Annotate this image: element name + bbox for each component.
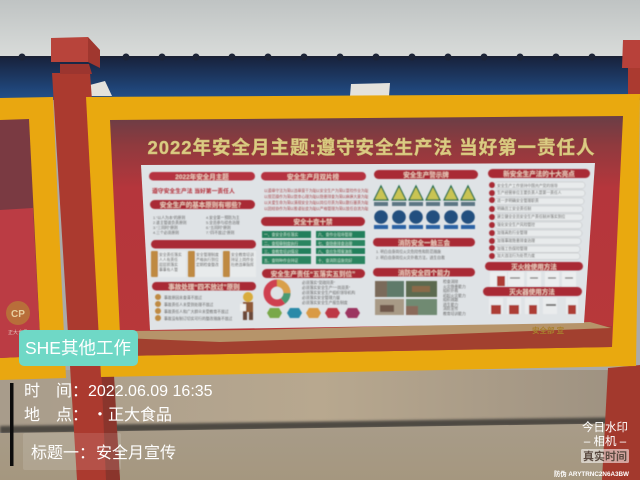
slogan list: 以敷衍塞责为耻 — [342, 200, 369, 205]
warning labels — [374, 202, 475, 206]
heading pill — [373, 268, 475, 277]
three duty cards — [151, 251, 256, 277]
poster bottom wave — [121, 326, 612, 356]
principles list: 6.“五同时”原则 — [206, 225, 231, 230]
slogan list: 以麻痹大意为耻 — [342, 194, 369, 199]
heading pill — [261, 172, 366, 181]
principles list: 5.全员参与综合治理 — [206, 220, 240, 225]
five-implementation list: 必须落实“党政同责” — [302, 280, 336, 285]
principles list: 2.谁主管谁负责原则 — [153, 220, 187, 225]
heading pill — [151, 240, 256, 248]
principles list: 4.三个必须原则 — [153, 230, 179, 235]
heading pill: 2022年安全月主题 — [175, 172, 229, 181]
white wall patches — [86, 81, 390, 96]
column 1: safety month theme — [149, 172, 256, 321]
poster signature: 安全部 宣 — [532, 325, 565, 335]
principles list: 7.“四不放过”原则 — [206, 230, 235, 235]
heading pill: 消防安全一触三会 — [398, 238, 450, 247]
column 2: slogans and ten-must — [261, 172, 369, 318]
mandatory circle signs — [374, 210, 475, 224]
principles list: 4.安全第一预防为主 — [206, 215, 240, 220]
heading pill — [149, 172, 255, 181]
ten numbered rows: 加强工伤保险管理 — [497, 246, 528, 251]
heading pill — [483, 287, 582, 296]
CP logo: CP — [11, 309, 25, 320]
four abilities list: 组织扑救 — [443, 288, 458, 293]
slogan list: 以推诿扯皮为耻 — [290, 206, 317, 211]
ten numbered rows: 进一步明确安全管理职责 — [497, 198, 539, 203]
fire safety notes — [376, 249, 445, 260]
fire safety notes: 1. 明白自身岗位火灾危险性和防范措施 — [376, 249, 441, 254]
ten numbered rows: 加强事故隐患排查治理 — [497, 238, 535, 243]
four-no list: 事故责任人和广大群众未受教育不放过 — [164, 309, 229, 314]
four-no list: 事故没有制订切实可行的整改措施不放过 — [164, 316, 233, 321]
ten numbered rows: 生产经营单位主要负责人是第一责任人 — [497, 190, 562, 195]
lower concrete wall — [0, 370, 640, 432]
right red post — [602, 40, 640, 480]
donut chart — [267, 283, 287, 303]
column 3: warning signs and fire safety — [373, 170, 478, 316]
timestamp and location block: 点： — [56, 406, 88, 424]
timestamp and location block: 间： — [56, 382, 88, 400]
poster background — [110, 116, 623, 356]
left display board — [0, 97, 66, 380]
four abilities list — [443, 279, 466, 316]
watermark logo: 真实时间 — [583, 449, 627, 463]
fire safety notes: 2. 明白自身岗位火灾扑救方法，逃生自救 — [376, 255, 445, 260]
five-implementation list — [302, 280, 355, 305]
three duty cards: 安全责任落实 — [159, 252, 182, 257]
green rule grid: 三、查教育培训情况 — [264, 249, 298, 254]
slogan list: 以违章蛮干为耻 — [290, 188, 317, 193]
timestamp and location block: 地 — [24, 406, 40, 424]
ten numbered rows: 强化安全生产风险管控 — [497, 222, 535, 227]
five hexagon badges — [267, 308, 360, 318]
five-implementation list: 必须落实安全生产“一岗双责” — [302, 285, 351, 290]
slogan list: 以团结协作为荣 — [264, 206, 291, 211]
three duty cards: 事事有人管 — [159, 267, 178, 272]
principles list: 3.“三同时”原则 — [153, 225, 178, 230]
four-no list: 事故原因未查清不放过 — [164, 295, 202, 300]
four abilities list: 初起火灾能力 — [443, 293, 466, 298]
sky background — [0, 0, 640, 60]
heading pill: 灭火器使用方法 — [509, 287, 555, 296]
four site photos — [375, 281, 437, 315]
four abilities list: 检查消除 — [443, 279, 458, 284]
category tag — [19, 330, 138, 366]
four-no list: 事故责任人未受到处理不放过 — [164, 302, 214, 307]
four abilities list: 逃生能力 — [443, 302, 458, 307]
heading pill: 安全十查十禁 — [294, 217, 333, 226]
three duty cards: 安全教育培训 — [231, 252, 254, 257]
five-implementation list: 必须落实安全管理力量 — [302, 295, 340, 300]
watermark logo — [581, 420, 629, 463]
heading pill: 灭火栓使用方法 — [511, 262, 557, 271]
heading pill — [261, 217, 365, 226]
slogan list: 以岗位尽责为荣 — [316, 200, 343, 205]
four abilities list: 消防宣传 — [443, 306, 458, 311]
three duty cards: 安全管理制度 — [196, 252, 219, 257]
slogan list — [264, 188, 369, 211]
green rule grid — [262, 231, 365, 264]
ten numbered rows: 加强高危行业管理 — [497, 230, 528, 235]
extinguisher usage steps — [489, 298, 578, 314]
three duty cards: 持证上岗作业 — [231, 257, 254, 262]
slogan list: 以冒险作业为耻 — [342, 188, 369, 193]
dark ground seam — [0, 417, 640, 434]
green rule grid: 六、查作业现场管理 — [318, 232, 352, 237]
four abilities list: 教育培训能力 — [443, 311, 466, 316]
icon: worker figure — [240, 292, 253, 320]
theme sentence: 遵守安全生产法 当好第一责任人 — [152, 187, 235, 195]
slogan list: 以侥幸心理为耻 — [290, 194, 317, 199]
ten numbered rows — [489, 182, 585, 260]
heading pill: 安全生产月双片榜 — [287, 172, 340, 181]
green rule grid: 十、查消防设施完好 — [318, 258, 352, 263]
four abilities list: 火灾隐患能力 — [443, 284, 466, 289]
ten numbered rows: 安全生产工作坚持中国共产党的领导 — [497, 183, 558, 188]
heading pill: 安全生产警示牌 — [403, 170, 449, 179]
ten numbered rows: 明确员工安全责任制 — [497, 206, 531, 211]
green rule grid: 七、查隐患排查治理 — [318, 241, 352, 246]
timestamp and location block — [10, 382, 213, 466]
left red post — [51, 37, 120, 480]
five-implementation list: 必须落实安全生产组织领导机构 — [302, 290, 355, 295]
pavement — [0, 423, 640, 480]
heading pill: 事故处理“四不放过”原则 — [168, 282, 240, 291]
mandatory labels — [374, 225, 475, 229]
main yellow frame — [86, 94, 640, 377]
timestamp and location block: 时 — [24, 382, 40, 400]
title-one note: 标题一： — [31, 444, 95, 462]
timestamp and location block: ・正大食品 — [92, 406, 172, 424]
heading pill — [152, 282, 256, 291]
green rule grid: 二、查规章制度执行 — [264, 241, 298, 246]
CP logo — [6, 301, 30, 336]
five-implementation list: 必须落实安全生产报告制度 — [302, 300, 348, 305]
slogan list: 以漠视安全为耻 — [290, 200, 317, 205]
slogan list: 以安全生产为荣 — [316, 188, 343, 193]
slogan list: 以严格管理为荣 — [316, 206, 343, 211]
four abilities list: 组织疏散 — [443, 297, 458, 302]
heading pill — [374, 170, 478, 179]
three duty cards: 严格执行到位 — [196, 257, 219, 262]
column 4: responsibilities and extinguisher use — [483, 169, 590, 314]
ten numbered rows: 建立健全全员安全生产责任制并落实到位 — [497, 214, 566, 219]
anti-fake code: 防伪 ARYTRNC2N6A3BW — [554, 469, 629, 478]
heading pill: 新安全生产法的十大亮点 — [503, 169, 575, 178]
category tag: SHE其他工作 — [25, 338, 131, 358]
heading pill — [373, 238, 475, 247]
slogan list: 以隐患排查为荣 — [316, 194, 343, 199]
slogan list: 以放任自流为耻 — [342, 206, 369, 211]
watermark logo: – 相机 – — [584, 434, 627, 448]
heading pill — [150, 200, 255, 209]
green rule grid: 八、查应急预案演练 — [318, 249, 352, 254]
slogan list: 以关爱生命为荣 — [264, 200, 291, 205]
title-one note: 安全月宣传 — [96, 444, 176, 462]
blue corrugated wall — [0, 54, 640, 100]
heading pill — [485, 262, 583, 271]
three duty cards: 层层抓落实 — [159, 262, 178, 267]
three duty cards: 人人有责任 — [159, 257, 178, 262]
heading pill: 安全生产的基本原则有哪些？ — [160, 200, 244, 209]
CP logo: 正大食品 — [8, 329, 28, 336]
ten numbered rows: 加大违法行为处罚力度 — [497, 253, 535, 258]
hydrant usage steps — [490, 272, 576, 286]
slogan list: 以规范操作为荣 — [264, 194, 291, 199]
principles list: 1.“以人为本”的原则 — [153, 215, 185, 220]
green rule grid: 五、查特种作业持证 — [264, 258, 298, 263]
heading pill: 安全生产责任“五落实五到位” — [271, 269, 355, 278]
heading pill — [262, 269, 365, 278]
three duty cards: 杜绝违章指挥 — [231, 262, 254, 267]
white content sheet — [141, 163, 595, 330]
heading pill — [488, 169, 590, 178]
timestamp and location block: 2022.06.09 16:35 — [88, 383, 213, 400]
three duty cards: 定期检查整改 — [196, 262, 219, 267]
title-one note — [23, 433, 176, 470]
four-no list — [155, 294, 233, 321]
principles list — [153, 215, 240, 235]
poster title: 2022年安全月主题:遵守安全生产法 当好第一责任人 — [148, 137, 595, 158]
green rule grid: 一、查安全责任落实 — [264, 232, 298, 237]
warning triangle signs — [374, 186, 475, 200]
heading pill: 消防安全四个能力 — [398, 268, 450, 277]
watermark logo: 今日水印 — [582, 420, 628, 434]
slogan list: 以遵章守法为荣 — [264, 188, 291, 193]
